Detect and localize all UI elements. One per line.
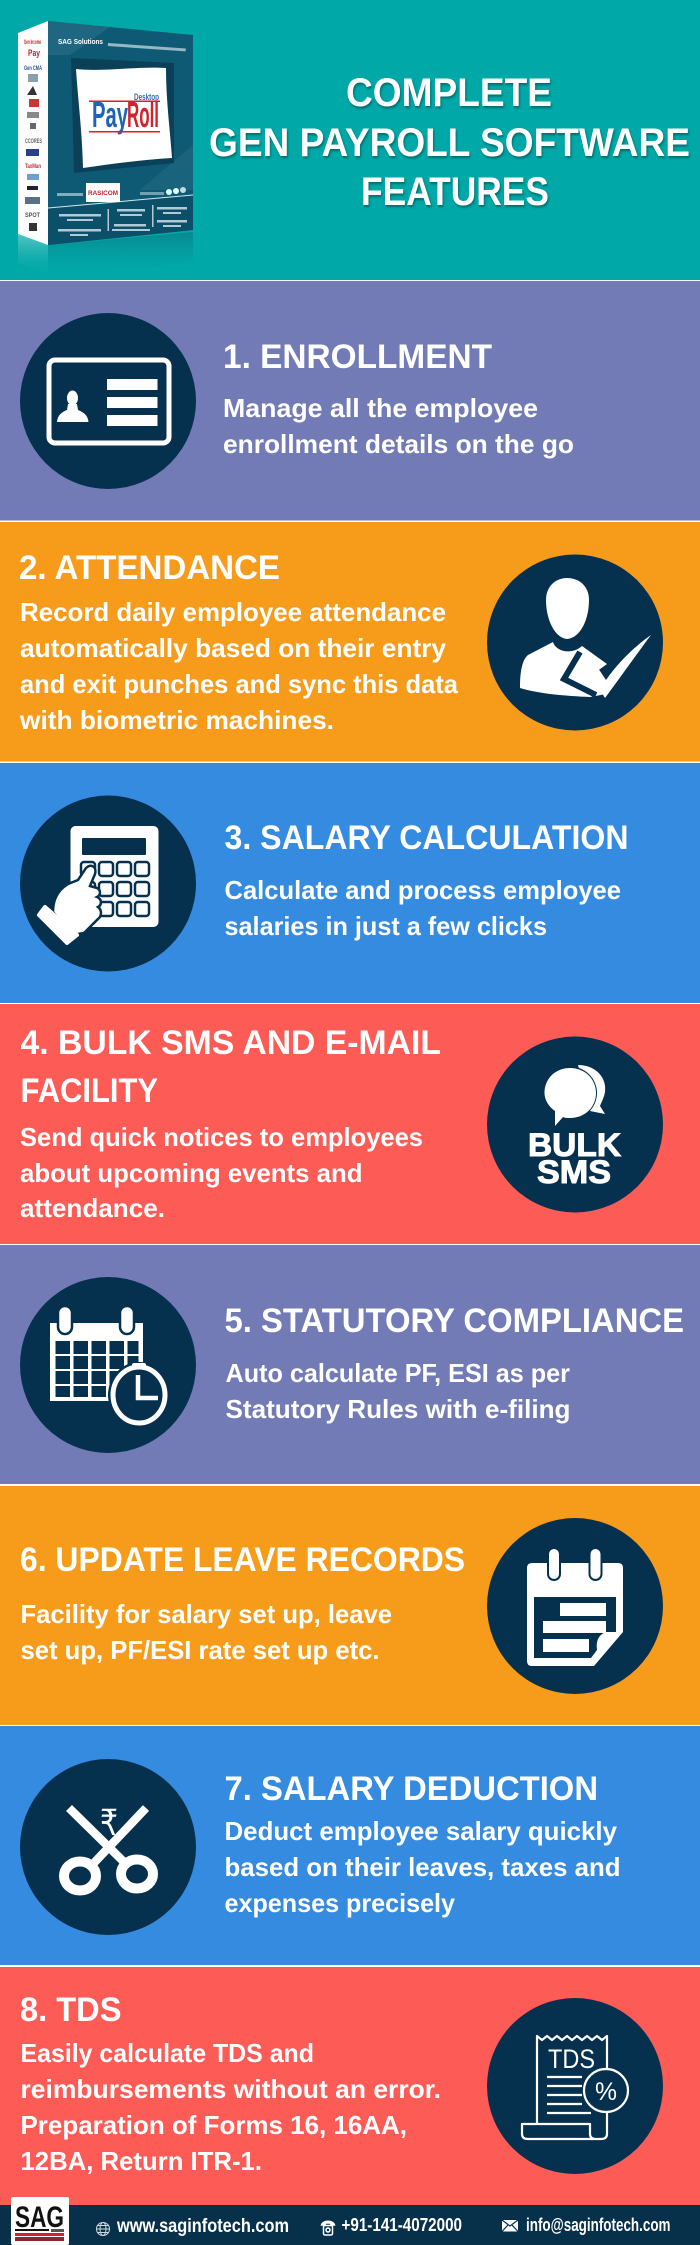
box side with client logos: Gen CMA xyxy=(24,66,42,72)
description: attendance. xyxy=(20,1193,165,1223)
title: FEATURES xyxy=(361,170,549,214)
heading: 6. UPDATE LEAVE RECORDS xyxy=(20,1541,465,1579)
description xyxy=(224,875,621,941)
icon: tds receipt xyxy=(487,1998,663,2174)
phone number: +91-141-4072000 xyxy=(342,2215,462,2235)
description: salaries in just a few clicks xyxy=(224,911,547,941)
heading: 7. SALARY DEDUCTION xyxy=(224,1770,598,1808)
description xyxy=(20,1122,423,1223)
description: Calculate and process employee xyxy=(224,875,621,905)
description xyxy=(20,2038,441,2176)
icon: tds receipt: TDS xyxy=(548,2044,595,2074)
title xyxy=(209,71,690,214)
panel: statutory compliance xyxy=(0,1245,700,1484)
icon: calculator with hand xyxy=(20,796,196,972)
box side with client logos: SPOT xyxy=(25,213,40,219)
description: expenses precisely xyxy=(224,1888,456,1918)
description: about upcoming events and xyxy=(20,1158,362,1188)
description: set up, PF/ESI rate set up etc. xyxy=(20,1635,380,1665)
icon: bulk sms xyxy=(487,1036,663,1212)
heading: 1. ENROLLMENT xyxy=(223,338,492,376)
logo: SAG xyxy=(11,2197,69,2245)
icon: notepad xyxy=(487,1518,663,1694)
description xyxy=(19,597,459,735)
description: and exit punches and sync this data xyxy=(20,669,459,699)
logo: SAG: SAG xyxy=(15,2201,64,2234)
description: Auto calculate PF, ESI as per xyxy=(226,1358,570,1388)
heading xyxy=(20,1024,441,1110)
box side with client logos: CCORES xyxy=(25,139,42,145)
heading: 4. BULK SMS AND E-MAIL xyxy=(20,1024,441,1062)
description: Record daily employee attendance xyxy=(20,597,446,627)
box front cover: SAG Solutions xyxy=(58,39,103,46)
heading: 3. SALARY CALCULATION xyxy=(224,819,628,857)
icon: bulk sms: SMS xyxy=(537,1154,611,1190)
icon: employee with check mark xyxy=(487,554,663,730)
title: COMPLETE xyxy=(346,71,552,115)
box side with client logos: Gen Income xyxy=(24,40,41,46)
panel: attendance xyxy=(0,522,700,762)
box side with client logos: TaxMan xyxy=(25,164,41,170)
icon: calendar with clock xyxy=(20,1277,196,1453)
panel: salary calculation xyxy=(0,763,700,1003)
panel: tds xyxy=(0,1967,700,2205)
icon: scissors with rupee: ₹ xyxy=(100,1803,118,1844)
description: with biometric machines. xyxy=(19,705,334,735)
description xyxy=(20,1599,392,1665)
panel: bulk sms and e-mail xyxy=(0,1004,700,1244)
product box illustration xyxy=(18,21,193,278)
description: Send quick notices to employees xyxy=(20,1122,423,1152)
panel: enrollment xyxy=(0,281,700,520)
box front cover: Roll xyxy=(127,94,159,135)
heading: 5. STATUTORY COMPLIANCE xyxy=(224,1302,684,1340)
description: 12BA, Return ITR-1. xyxy=(20,2146,262,2176)
panel: update leave records xyxy=(0,1486,700,1725)
description: Statutory Rules with e-filing xyxy=(226,1394,570,1424)
description: Deduct employee salary quickly xyxy=(224,1816,618,1846)
heading: 8. TDS xyxy=(20,1991,122,2029)
icon: id card xyxy=(20,313,196,489)
description: Facility for salary set up, leave xyxy=(20,1599,392,1629)
box side with client logos: Pay xyxy=(28,48,40,58)
box front cover: RASICOM xyxy=(88,191,118,197)
payroll logo: Desktop xyxy=(134,92,159,102)
icon: telephone xyxy=(322,2221,334,2235)
box side with client logos xyxy=(18,21,48,245)
box front cover xyxy=(48,21,193,245)
icon: scissors with rupee xyxy=(20,1759,196,1935)
icon: tds receipt: % xyxy=(595,2078,617,2106)
description: automatically based on their entry xyxy=(20,633,447,663)
description xyxy=(223,393,574,459)
payroll logo: Pay xyxy=(92,94,128,135)
description xyxy=(226,1358,570,1424)
panel: header xyxy=(0,0,700,280)
description: Preparation of Forms 16, 16AA, xyxy=(20,2110,407,2140)
heading: 2. ATTENDANCE xyxy=(19,549,280,587)
panel: salary deduction xyxy=(0,1726,700,1965)
description: based on their leaves, taxes and xyxy=(224,1852,620,1882)
description: Easily calculate TDS and xyxy=(20,2038,314,2068)
website: www.saginfotech.com xyxy=(116,2216,289,2237)
heading: FACILITY xyxy=(20,1072,158,1110)
description: Manage all the employee xyxy=(223,393,538,423)
footer bar xyxy=(0,2197,700,2245)
icon: globe xyxy=(96,2222,110,2236)
description: enrollment details on the go xyxy=(223,429,574,459)
icon: bulk sms: BULK xyxy=(528,1127,621,1163)
description xyxy=(224,1816,620,1918)
description: reimbursements without an error. xyxy=(20,2074,441,2104)
icon: envelope xyxy=(502,2220,518,2232)
